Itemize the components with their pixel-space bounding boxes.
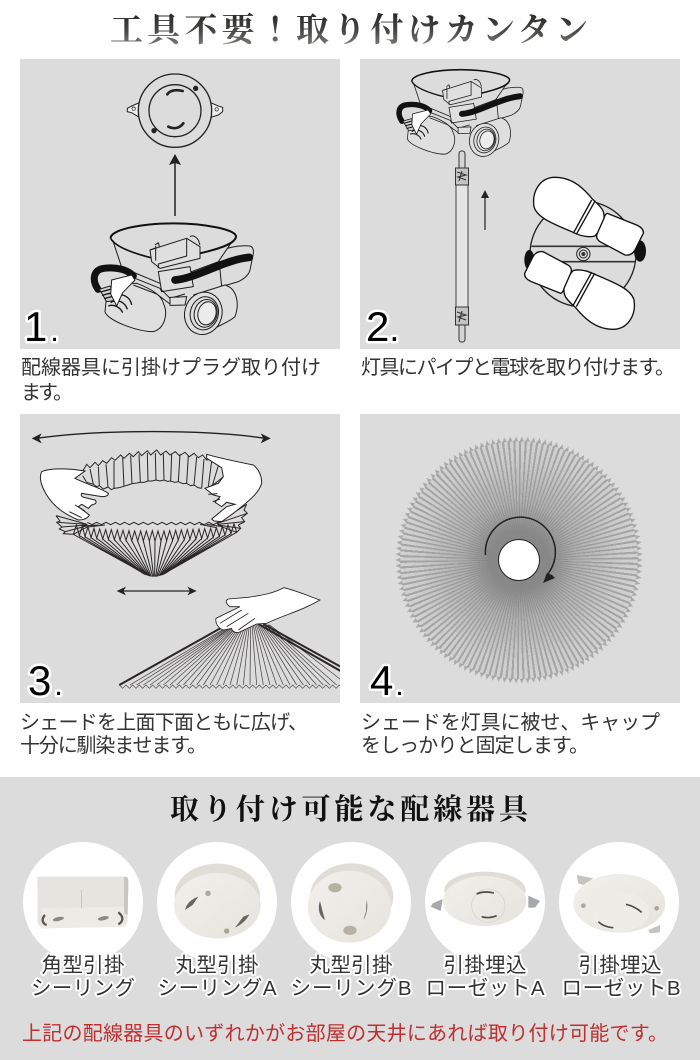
caption: step 3 [20,711,308,757]
label: round ceiling B: シーリングB [290,977,412,1000]
panel: step 2 [360,59,680,350]
label: round ceiling A: シーリングA [158,977,277,1000]
label: recessed rosette A [426,954,545,1000]
icon: light fixture [94,223,253,339]
icon: base with bulbs [524,177,646,329]
caption: step 1: 配線器具に引掛けプラグ取り付け [21,356,321,379]
title: 工具不要！取り付けカンタン [110,4,588,51]
arrow: up [481,190,489,230]
icon: hand pressing [216,588,320,633]
label: round ceiling A [158,954,277,1000]
label: round ceiling B [290,954,412,1000]
number 4: 4. [370,657,404,704]
label: square ceiling [31,954,135,1000]
icon: left hand [40,469,108,520]
label: recessed rosette B [562,954,680,1000]
arrow: wide stretch [32,432,271,443]
fitting: recessed rosette B [559,842,679,962]
fitting: square ceiling [23,842,143,962]
arrow: narrow stretch [117,587,197,595]
number 3: 3. [28,657,63,704]
caption: step 2: 灯具にパイプと電球を取り付けます。 [361,356,675,379]
icon: pipe [456,151,468,342]
label: square ceiling: 角型引掛 [42,954,124,977]
icon: ceiling outlet [127,74,223,147]
panel: step 4 [360,414,680,704]
icon: centre hole [498,540,540,580]
arrow: up [169,154,181,216]
fitting: round ceiling A [157,842,277,962]
label: recessed rosette A: ローゼットA [426,977,545,1000]
caption: step 4 [361,711,660,757]
label: round ceiling A: 丸型引掛 [176,954,258,977]
caption: step 4: シェードを灯具に被せ、キャップ [361,711,660,734]
number 2: 2. [366,303,399,350]
panel: step 3 [20,414,349,704]
fitting: round ceiling B [291,842,411,962]
label: round ceiling B: 丸型引掛 [310,954,392,977]
note: red: 上記の配線器具のいずれかがお部屋の天井にあれば取り付け可能です。 [22,1022,668,1045]
caption: step 3: シェードを上面下面ともに広げ、 [20,711,308,734]
icon: flattened shade [119,624,349,688]
panel: compatible fittings [0,777,700,1060]
caption: step 4: をしっかりと固定します。 [361,734,589,757]
label: square ceiling: シーリング [31,977,135,1000]
icon: shade held open [40,450,262,577]
icon: pleated shade from above [396,438,642,682]
heading: 取り付け可能な配線器具 [170,787,532,828]
caption: step 3: 十分に馴染ませます。 [20,734,207,757]
caption: step 1 [21,356,321,404]
arrow: rotate clockwise [485,517,555,583]
icon: light fixture [399,70,523,160]
number 1: 1. [24,303,59,350]
fitting: recessed rosette A [425,842,545,962]
label: recessed rosette B: ローゼットB [562,977,680,1000]
icon: right hand [205,454,262,522]
caption: step 1: ます。 [21,382,73,404]
label: recessed rosette A: 引掛埋込 [444,954,526,977]
label: recessed rosette B: 引掛埋込 [578,954,662,977]
panel: step 1 [20,59,340,350]
